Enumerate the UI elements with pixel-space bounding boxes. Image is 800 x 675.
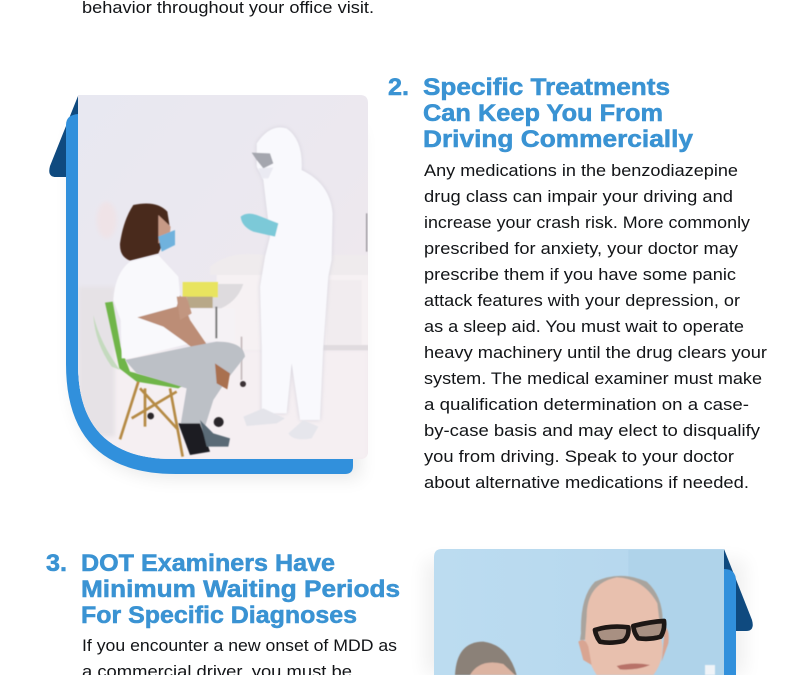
- section 3 number: 3.: [46, 550, 67, 577]
- section 2 heading: Specific Treatments: [423, 74, 670, 101]
- section 2 body text: heavy machinery until the drug clears your: [424, 344, 768, 362]
- section 2 image: [49, 95, 368, 478]
- section 3 image: [425, 549, 753, 675]
- section 3 heading: [81, 550, 400, 629]
- patient: [113, 203, 245, 455]
- cabinet: [217, 275, 368, 350]
- icon: dark blue tab: [49, 96, 78, 177]
- section 2 heading: Driving Commercially: [423, 126, 694, 153]
- side table: [147, 282, 246, 427]
- section 2 body text: as a sleep aid. You must wait to operate: [424, 318, 744, 336]
- image shadow: [72, 130, 360, 478]
- glasses: [595, 621, 664, 643]
- section 2 body text: system. The medical examiner must make: [424, 370, 762, 388]
- section 2 body text: prescribed for anxiety, your doctor may: [424, 240, 739, 258]
- section 2 body text: increase your crash risk. More commonly: [424, 214, 751, 232]
- photo: patient and examiner: [78, 95, 368, 460]
- section 2 body text: a qualification determination on a case-: [424, 396, 749, 414]
- section 2 body text: Any medications in the benzodiazepine: [424, 162, 738, 180]
- blue frame: [724, 569, 736, 675]
- chair: [93, 302, 183, 457]
- section 3 heading: DOT Examiners Have: [81, 550, 335, 577]
- section 2 body text: prescribe them if you have some panic: [424, 266, 736, 284]
- section 2 heading: [423, 74, 694, 153]
- section 3 heading: For Specific Diagnoses: [81, 602, 357, 629]
- examiner: [257, 127, 333, 420]
- section 2 body text: attack features with your depression, or: [424, 292, 741, 310]
- icon: dark blue tab: [724, 549, 753, 631]
- woman: [455, 642, 517, 675]
- section 3 heading: Minimum Waiting Periods: [81, 576, 400, 603]
- section 2 body text: you from driving. Speak to your doctor: [424, 448, 735, 466]
- section 2 body text: about alternative medications if needed.: [424, 474, 749, 492]
- image shadow: [425, 560, 745, 675]
- man: [580, 576, 665, 640]
- section 3 body text: [82, 637, 397, 675]
- section 2 heading: Can Keep You From: [423, 100, 663, 127]
- section 3 body text: If you encounter a new onset of MDD as: [82, 637, 397, 655]
- section 2 number: 2.: [388, 74, 409, 101]
- section 2 body text: drug class can impair your driving and: [424, 188, 733, 206]
- photo: two people: [434, 549, 725, 675]
- section 2 body text: [424, 162, 768, 492]
- blue frame: [66, 114, 353, 474]
- section 2 body text: by-case basis and may elect to disqualify: [424, 422, 761, 440]
